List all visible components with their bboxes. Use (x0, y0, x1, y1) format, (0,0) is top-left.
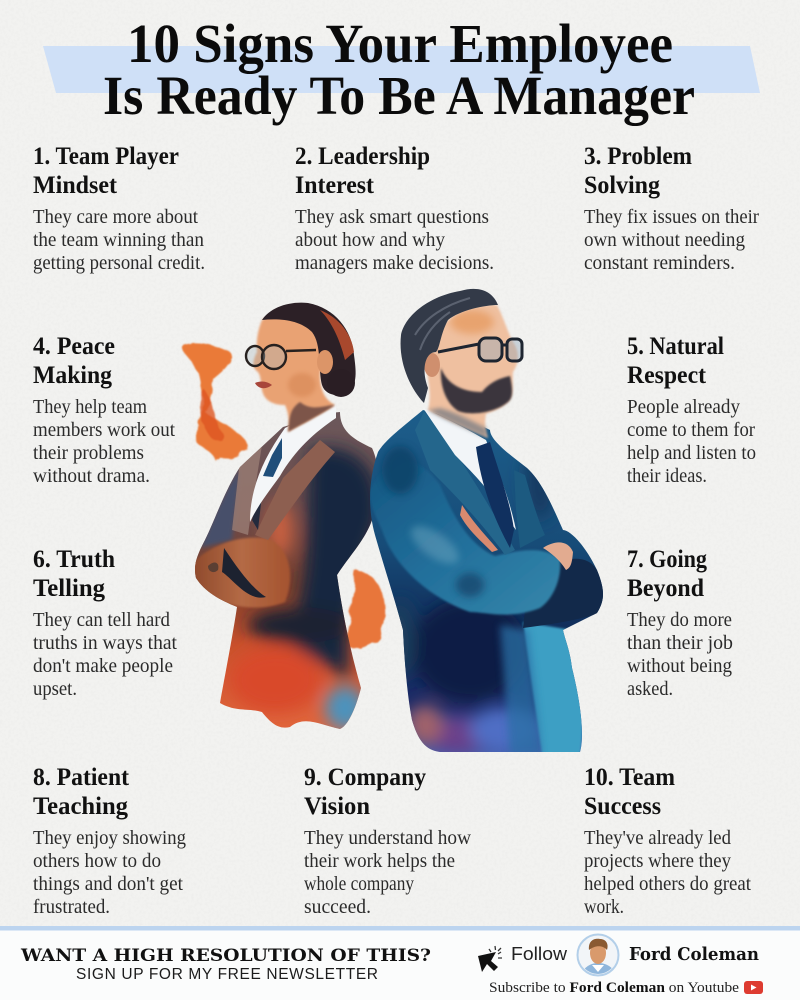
man hands (460, 505, 498, 552)
woman hair (262, 303, 356, 395)
sign 10: Team Success: 10. Team (584, 764, 675, 791)
man lower jacket panel (523, 622, 583, 755)
sign 1: Team Player Mindset: 1. Team Player (33, 143, 179, 170)
sign 9: Company Vision: They understand how (304, 828, 471, 849)
sign 6: Truth Telling: Telling (33, 575, 105, 602)
sign 9: Company Vision: 9. Company (304, 764, 426, 791)
woman crossed forearm (193, 538, 290, 607)
sign 3: Problem Solving: constant reminders. (584, 253, 735, 274)
man crossed arm (370, 461, 560, 615)
sign 3: Problem Solving: Solving (584, 172, 660, 199)
sign 6: Truth Telling: They can tell hard (33, 610, 170, 631)
youtube subscribe line: Subscribe to Ford Coleman on Youtube (489, 980, 739, 996)
sign 7: Going Beyond: 7. Going (627, 546, 707, 573)
sign 6: Truth Telling (33, 546, 178, 700)
illustration: orange watercolor splashes (181, 342, 385, 648)
sign 1: Team Player Mindset: They care more about (33, 207, 199, 228)
sign 8: Patient Teaching (33, 764, 186, 918)
sign 8: Patient Teaching: 8. Patient (33, 764, 130, 791)
woman neck and face (253, 316, 335, 432)
sign 8: Patient Teaching: frustrated. (33, 897, 110, 918)
icon: youtube (744, 981, 763, 994)
sign 4: Peace Making: 4. Peace (33, 333, 115, 360)
sign 3: Problem Solving: own without needing (584, 230, 745, 251)
sign 8: Patient Teaching: others how to do (33, 851, 161, 872)
sign 8: Patient Teaching: They enjoy showing (33, 828, 186, 849)
footer panel (0, 926, 800, 1000)
sign 1: Team Player Mindset (33, 143, 205, 274)
sign 4: Peace Making: without drama. (33, 466, 150, 487)
sign 10: Team Success: Success (584, 793, 661, 820)
title: Is Ready To Be A Manager (103, 65, 695, 126)
sign 6: Truth Telling: don't make people (33, 656, 173, 677)
sign 7: Going Beyond: than their job (627, 633, 733, 654)
sign 10: Team Success: work. (584, 897, 624, 918)
sign 5: Natural Respect (627, 333, 756, 487)
sign 2: Leadership Interest: managers make decisions. (295, 253, 494, 274)
illustration: man in suit (360, 289, 610, 760)
sign 6: Truth Telling: truths in ways that (33, 633, 178, 654)
sign 2: Leadership Interest: about how and why (295, 230, 445, 251)
sign 1: Team Player Mindset: the team winning than (33, 230, 204, 251)
man face and neck (426, 305, 518, 438)
follow label: Follow (511, 944, 568, 964)
sign 7: Going Beyond: They do more (627, 610, 732, 631)
sign 3: Problem Solving: They fix issues on their (584, 207, 759, 228)
sign 9: Company Vision: Vision (304, 793, 370, 820)
Ford Coleman name: Ford Coleman (629, 944, 759, 965)
sign 7: Going Beyond: without being (627, 656, 732, 677)
woman blazer (195, 412, 376, 729)
man glasses (438, 338, 522, 361)
sign 10: Team Success (584, 764, 752, 918)
sign 4: Peace Making (33, 333, 176, 487)
sign 7: Going Beyond: asked. (627, 679, 673, 700)
sign 7: Going Beyond: Beyond (627, 575, 704, 602)
sign 2: Leadership Interest (295, 143, 494, 274)
newsletter call to action (20, 946, 431, 983)
sign 4: Peace Making: members work out (33, 420, 176, 441)
sign 8: Patient Teaching: Teaching (33, 793, 128, 820)
man hair (401, 289, 498, 403)
woman lapels (232, 445, 262, 535)
man lapel (415, 412, 515, 555)
sign 5: Natural Respect: come to them for (627, 420, 755, 441)
sign 5: Natural Respect: 5. Natural (627, 333, 724, 360)
woman upper sleeve shading (200, 468, 240, 548)
sign 9: Company Vision: their work helps the (304, 851, 455, 872)
newsletter call to action: SIGN UP FOR MY FREE NEWSLETTER (76, 966, 378, 983)
man dark forearm (523, 559, 603, 628)
icon: click cursor (478, 946, 502, 972)
title highlight band (43, 46, 760, 93)
woman glasses (246, 345, 316, 369)
sign 3: Problem Solving: 3. Problem (584, 143, 692, 170)
sign 9: Company Vision (304, 764, 471, 918)
sign 3: Problem Solving (584, 143, 759, 274)
man shirt and tie (423, 408, 516, 530)
sign 6: Truth Telling: upset. (33, 679, 77, 700)
sign 10: Team Success: projects where they (584, 851, 731, 872)
man beard (441, 368, 512, 413)
illustration: woman in blazer (195, 302, 376, 729)
sign 9: Company Vision: succeed. (304, 897, 371, 918)
title: 10 Signs Your Employee (127, 13, 673, 74)
sign 4: Peace Making: They help team (33, 397, 147, 418)
sign 10: Team Success: They've already led (584, 828, 731, 849)
sign 9: Company Vision: whole company (304, 874, 414, 895)
sign 6: Truth Telling: 6. Truth (33, 546, 115, 573)
man jacket (370, 410, 603, 752)
sign 4: Peace Making: their problems (33, 443, 144, 464)
sign 5: Natural Respect: their ideas. (627, 466, 707, 487)
sign 8: Patient Teaching: things and don't get (33, 874, 184, 895)
sign 7: Going Beyond (627, 546, 733, 700)
sign 1: Team Player Mindset: getting personal credit. (33, 253, 205, 274)
icon: Ford Coleman avatar (578, 934, 618, 976)
sign 5: Natural Respect: help and listen to (627, 443, 756, 464)
title (103, 13, 695, 126)
woman shirt and tie (250, 404, 336, 522)
sign 2: Leadership Interest: Interest (295, 172, 375, 199)
sign 5: Natural Respect: People already (627, 397, 740, 418)
sign 2: Leadership Interest: 2. Leadership (295, 143, 430, 170)
newsletter call to action: WANT A HIGH RESOLUTION OF THIS? (20, 946, 431, 966)
sign 5: Natural Respect: Respect (627, 362, 707, 389)
sign 2: Leadership Interest: They ask smart questions (295, 207, 489, 228)
sign 10: Team Success: helped others do great (584, 874, 752, 895)
sign 1: Team Player Mindset: Mindset (33, 172, 118, 199)
sign 4: Peace Making: Making (33, 362, 112, 389)
